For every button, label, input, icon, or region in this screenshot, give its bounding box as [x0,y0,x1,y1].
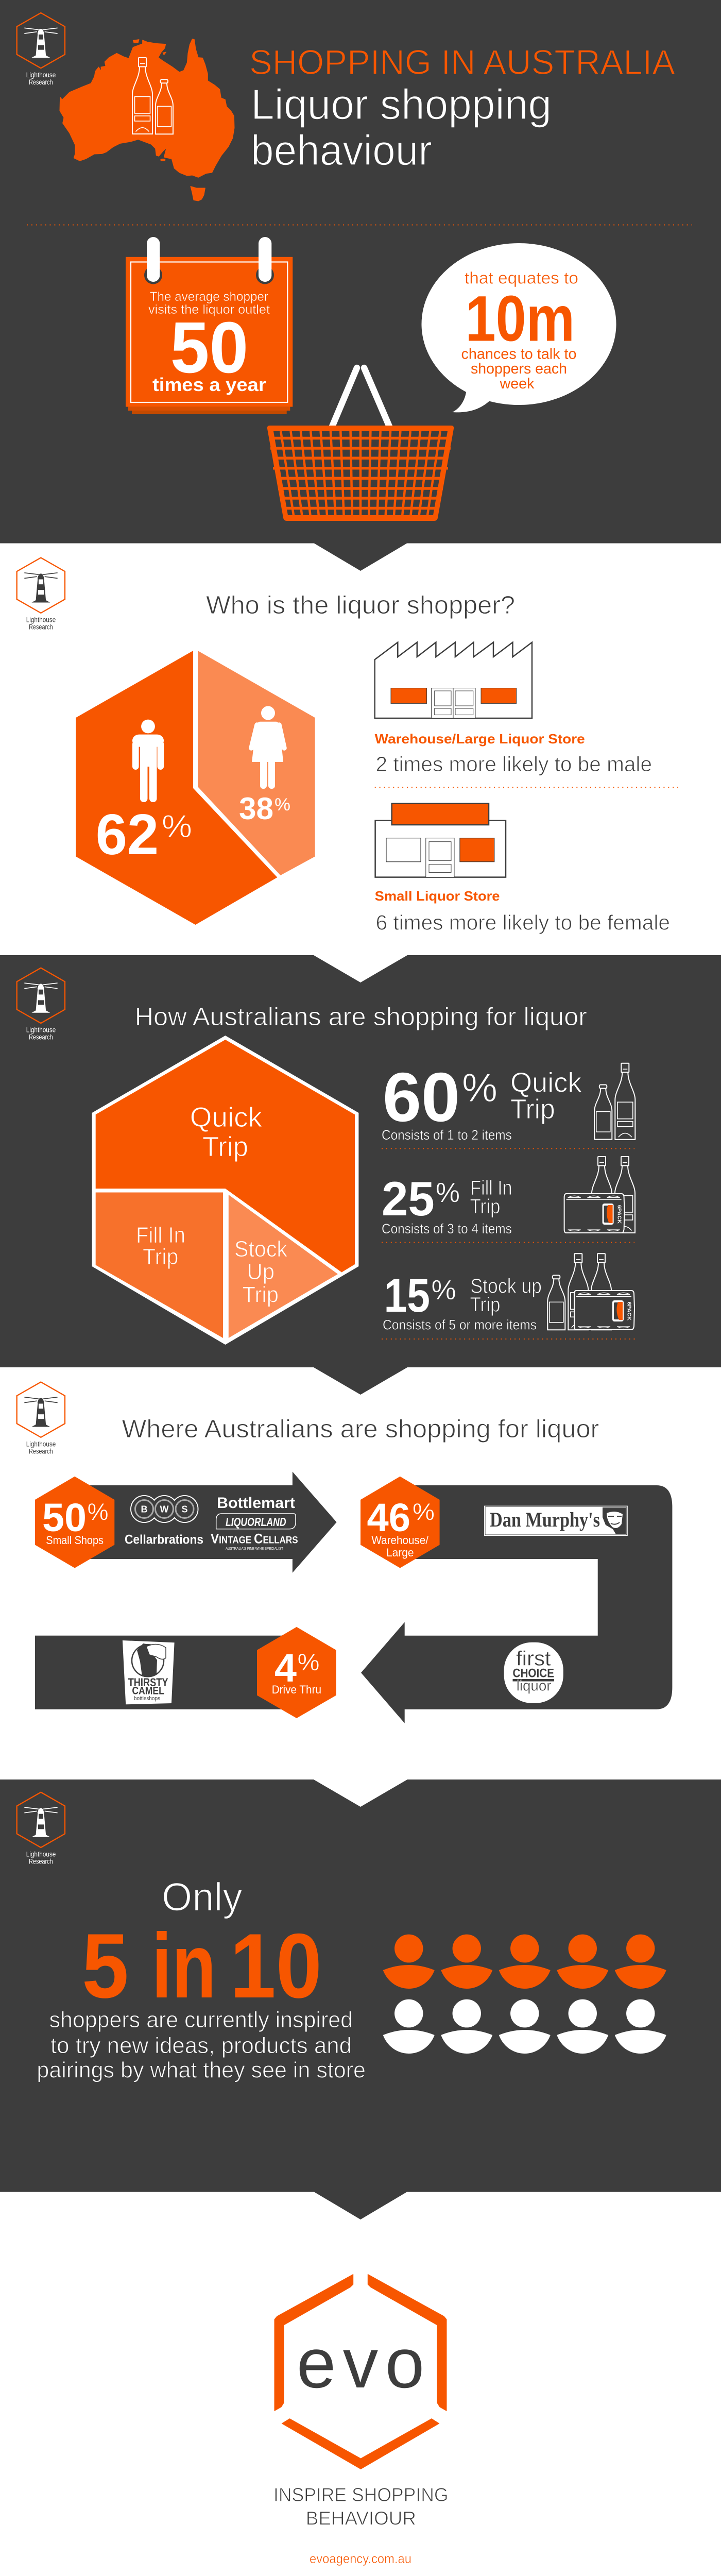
callout: speech bubble, 10m chances [421,243,616,412]
stat: 60% quick trip: Quick [510,1067,582,1098]
icon: map of Australia with bottles [60,39,234,201]
stat: 25% fill in trip: Trip [470,1195,500,1218]
badge: 50% small shops: 50 [42,1496,87,1540]
stat: 15% stock up trip: 15 [384,1269,430,1322]
chart segment: stock up trip: Up [247,1259,274,1284]
logo: evo hexagon: evo [297,2324,424,2403]
badge: 4% drive thru: % [298,1649,319,1675]
callout: speech bubble, 10m chances: shoppers each [471,361,567,377]
logo: first choice liquor [504,1642,563,1703]
text: shoppers inspired description: to try new ideas, products and [50,2033,352,2058]
text: warehouse stat: 2 times more likely to be male [376,752,652,776]
icon: Lighthouse Research logo, intro [17,13,65,86]
stat: 5 in 10 [82,1914,322,2017]
icon: Lighthouse Research logo, who: Lighthouse [26,616,56,623]
badge: 4% drive thru [257,1627,336,1718]
stat: 15% stock up trip: Stock up [470,1275,542,1298]
badge: 46% warehouse/large: 46 [367,1496,410,1540]
label: 62%: 62 [96,803,159,867]
icon row: five orange people [383,1935,666,1989]
icon: warehouse store [375,642,532,718]
heading: how Australians are shopping: How Australians are shopping for liquor [135,1003,587,1031]
stat: 5 in 10: in [152,1914,216,2017]
chart segment: stock up trip: Stock [234,1236,288,1262]
icon: calendar, 50 times a year: visits the liquor outlet [148,302,270,317]
chart segment: female 38% [198,651,315,875]
arrow: section notch 1 [314,543,407,571]
logo: Bottlemart: Bottlemart [217,1495,295,1512]
stat: 25% fill in trip: % [436,1177,460,1208]
callout: speech bubble, 10m chances: week [500,376,535,392]
text: shoppers inspired description: shoppers are currently inspired [49,2007,353,2032]
callout: speech bubble, 10m chances: chances to talk to [461,346,577,363]
arrow: section notch 4 [314,1780,407,1807]
logo: BWS: B [141,1504,147,1515]
text: small store stat [375,888,670,935]
icon: calendar, 50 times a year: 50 [170,307,248,388]
logo: evo hexagon [274,2274,447,2469]
badge: 46% warehouse/large: Large [386,1546,414,1559]
logo: Thirsty Camel: CAMEL [132,1685,164,1697]
text: evo tagline: BEHAVIOUR [306,2507,416,2529]
stat: 15% stock up trip: Trip [470,1293,500,1316]
icon: Lighthouse Research logo, who: Research [29,623,53,631]
arrow: warehouse U-turn arrow [361,1485,672,1723]
logo: Thirsty Camel: THIRSTY [128,1676,168,1689]
icon: fill in trip bottles and six pack [564,1157,635,1233]
text: small store stat: 6 times more likely to be female [376,911,670,935]
callout: speech bubble, 10m chances: 10m [466,283,575,354]
icon: stock up trip bottles and six pack [547,1253,634,1330]
chart segment: fill in trip: Trip [143,1244,178,1269]
label: 62% [96,803,192,867]
stat: 60% quick trip: % [462,1065,497,1110]
stat: 5 in 10: 10 [230,1914,322,2017]
icon: Lighthouse Research logo, who [17,557,65,631]
stat: 60% quick trip [382,1058,582,1143]
text: evo tagline: INSPIRE SHOPPING [273,2484,448,2505]
text: website: evoagency.com.au [310,2552,411,2566]
title [249,43,676,174]
badge: 46% warehouse/large: Warehouse/ [371,1534,429,1547]
icon: calendar, 50 times a year [126,237,293,414]
logo: first choice liquor: liquor [517,1677,552,1694]
logo: BWS: S [181,1504,188,1515]
chart segment: male 62% [76,651,277,925]
arrow: section notch 5 [314,2192,407,2219]
stat: 5 in 10: 5 [82,1914,129,2017]
label: 62%: % [162,809,192,844]
stat: 25% fill in trip [382,1172,512,1236]
stat: 25% fill in trip: Consists of 3 to 4 items [382,1221,512,1236]
arrow: section notch 2 [314,955,407,982]
icon: fill in trip bottles and six pack: 6PACK [616,1205,622,1224]
stat: 60% quick trip: Consists of 1 to 2 items [382,1127,512,1143]
heading: who is the liquor shopper: Who is the liquor shopper? [206,591,515,619]
stat: 15% stock up trip: % [432,1275,456,1306]
chart segment: quick trip: Trip [202,1131,248,1162]
stat: 60% quick trip: 60 [383,1058,460,1136]
icon row: five white people [383,1999,666,2054]
heading: only: Only [162,1875,243,1920]
badge: 46% warehouse/large [360,1477,440,1568]
logo: Cellarbrations: Cellarbrations [125,1533,203,1547]
arrow: drive thru band [35,1636,297,1709]
logo: BWS [131,1496,198,1522]
logo: Liquorland: LIQUORLAND [226,1515,286,1529]
badge: 4% drive thru: Drive Thru [272,1683,321,1696]
badge: 50% small shops: % [88,1498,109,1525]
chart segment: fill in trip: Fill In [136,1223,185,1248]
logo: Thirsty Camel [123,1640,175,1704]
text: shoppers inspired description: pairings by what they see in store [37,2058,366,2083]
chart: gender split hexagon [76,651,315,925]
panel: where Australians shop background [0,1367,721,1780]
chart: trip type hexagon [92,1036,358,1345]
panel: intro section background [0,0,721,543]
chart segment: fill in trip [96,1192,223,1338]
title: Liquor shopping [251,80,552,128]
logo: BWS: W [160,1504,169,1515]
icon: woman [251,706,284,789]
text: warehouse stat: Warehouse/Large Liquor Store [375,731,585,747]
icon: calendar, 50 times a year: The average shopper [150,290,268,304]
icon: calendar, 50 times a year: times a year [152,374,266,395]
icon: Lighthouse Research logo, how [17,968,65,1041]
icon: Lighthouse Research logo, how: Lighthouse [26,1026,56,1034]
callout: speech bubble, 10m chances: that equates to [465,269,578,287]
icon: Lighthouse Research logo, inspired: Lighthouse [26,1851,56,1858]
icon: Lighthouse Research logo, intro: Research [29,78,53,86]
logo: Vintage Cellars: VINTAGE CELLARS [211,1531,298,1547]
stat: 60% quick trip: Trip [510,1094,555,1125]
arrow: section notch 3 [314,1367,407,1395]
logo: Vintage Cellars: AUSTRALIA'S FINE WINE SPECIALIST [226,1547,284,1551]
chart segment: quick trip: Quick [190,1102,263,1133]
arrow: small shops arrow [75,1471,337,1573]
icon: Lighthouse Research logo, intro: Lighthouse [26,71,56,79]
panel: evo footer background [0,2192,721,2576]
badge: 50% small shops: Small Shops [46,1534,104,1547]
icon: Lighthouse Research logo, how: Research [29,1033,53,1041]
badge: 4% drive thru: 4 [274,1646,297,1690]
text: warehouse stat [375,731,652,776]
icon: Lighthouse Research logo, inspired [17,1792,65,1866]
logo: first choice liquor: first [516,1648,551,1670]
stat: 25% fill in trip: Fill In [470,1177,512,1199]
heading: where Australians are shopping: Where Australians are shopping for liquor [122,1415,599,1443]
text: shoppers inspired description [37,2007,366,2083]
panel: who is the liquor shopper background [0,543,721,955]
title: behaviour [251,126,432,174]
logo: Dan Murphy's [484,1506,628,1536]
stat: 15% stock up trip [383,1269,542,1333]
text: evo tagline [273,2484,448,2529]
label: 38% [239,791,290,826]
icon: Lighthouse Research logo, where: Research [29,1448,53,1455]
stat: 15% stock up trip: Consists of 5 or more items [383,1317,537,1333]
label: 38%: 38 [239,791,273,826]
icon: man [132,720,164,802]
chart segment: stock up trip: Trip [242,1282,279,1308]
stat: 25% fill in trip: 25 [382,1172,435,1226]
icon: quick trip bottles [594,1063,635,1140]
logo: Thirsty Camel: bottleshops [134,1696,160,1702]
badge: 46% warehouse/large: % [413,1498,435,1525]
panel: inspired shoppers background [0,1780,721,2192]
title: SHOPPING IN AUSTRALIA [249,43,676,82]
logo: Dan Murphy's: Dan Murphy's [490,1508,600,1531]
label: 38%: % [274,795,290,815]
chart segment: stock up trip [229,1195,338,1338]
text: small store stat: Small Liquor Store [375,888,500,904]
icon: shopping basket [267,368,454,521]
chart segment: quick trip [96,1040,355,1273]
badge: 50% small shops [35,1477,114,1568]
icon: small store [375,804,506,877]
panel: how Australians shop background [0,955,721,1367]
icon: Lighthouse Research logo, where [17,1382,65,1455]
logo: first choice liquor: CHOICE [513,1666,554,1680]
icon: Lighthouse Research logo, inspired: Research [29,1858,53,1866]
icon: Lighthouse Research logo, where: Lighthouse [26,1440,56,1448]
icon: stock up trip bottles and six pack: 6PACK [626,1302,631,1321]
